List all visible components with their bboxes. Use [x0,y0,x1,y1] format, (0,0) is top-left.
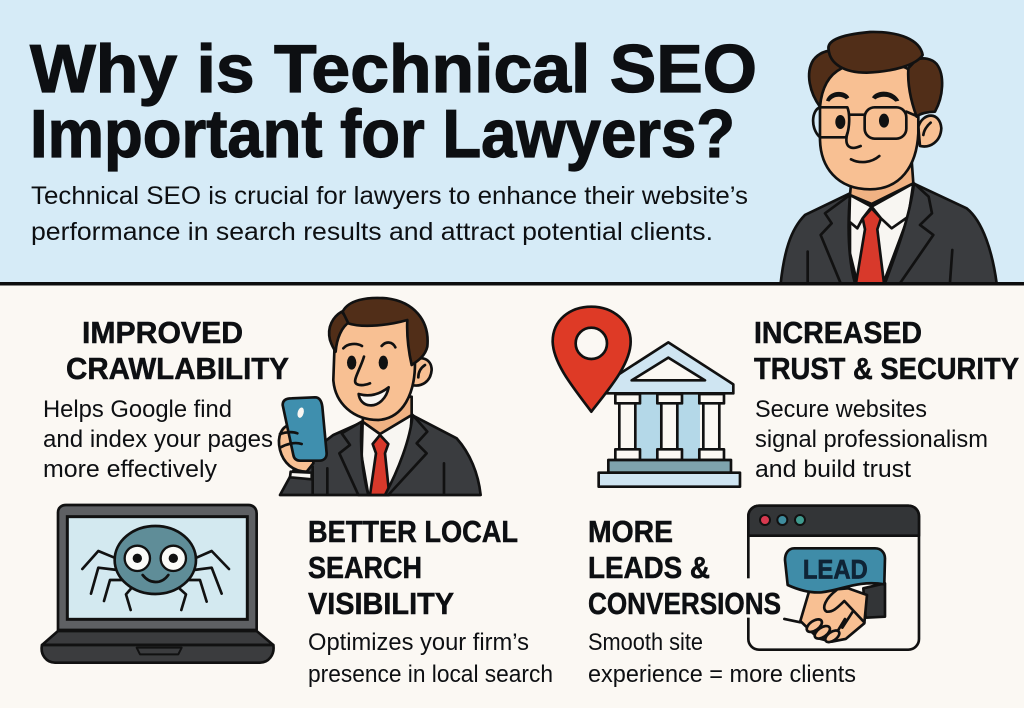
text: local search description: presence in local search [308,661,553,688]
heading: increased trust and security: INCREASED [754,315,922,350]
icon: smiling lawyer with phone [279,298,481,495]
text: local search description: Optimizes your firm’s [308,629,529,656]
text: trust description: Secure websites [755,396,927,423]
heading: better local search visibility: SEARCH [308,550,422,585]
text: leads description [588,629,856,688]
text: crawlability description: more effectively [43,456,217,483]
heading: more leads and conversions: MORE [588,514,673,549]
text: crawlability description: and index your pages [43,426,273,453]
header band [0,0,1024,283]
panel: more leads and conversions [588,506,919,688]
text: trust description: signal professionalism [755,426,988,453]
text: local search description [308,629,553,688]
heading: increased trust and security [754,315,1019,386]
title: Important for Lawyers? [30,96,735,172]
subtitle: Technical SEO is crucial for lawyers to enhance their website’s [31,182,748,210]
icon: browser window with lead handshake [735,506,919,650]
title [30,31,757,172]
panel: increased trust and security [553,307,1019,487]
panel: better local search visibility [42,505,553,688]
icon: courthouse with map pin [553,307,740,487]
heading: better local search visibility [308,514,518,621]
icon: browser window with lead handshake: LEAD [803,554,868,584]
icon: lawyer with glasses [781,32,997,283]
heading: more leads and conversions: LEADS & [588,550,710,585]
heading: more leads and conversions: CONVERSIONS [588,586,781,621]
subtitle: performance in search results and attract potential clients. [31,218,713,246]
text: trust description [755,396,988,483]
heading: improved crawlability: CRAWLABILITY [66,351,289,386]
text: crawlability description: Helps Google find [43,396,232,423]
header divider [0,282,1024,286]
heading: improved crawlability: IMPROVED [82,315,243,350]
title: Why is Technical SEO [30,31,757,107]
heading: more leads and conversions [588,514,781,621]
heading: improved crawlability [66,315,289,386]
heading: better local search visibility: VISIBILITY [308,586,454,621]
icon: laptop with spider [42,505,274,663]
text: crawlability description [43,396,273,483]
panel: improved crawlability [43,298,481,495]
heading: better local search visibility: BETTER LOCAL [308,514,518,549]
text: trust description: and build trust [755,456,911,483]
subtitle [31,182,748,246]
text: leads description: Smooth site [588,629,703,656]
text: leads description: experience = more clients [588,661,856,688]
